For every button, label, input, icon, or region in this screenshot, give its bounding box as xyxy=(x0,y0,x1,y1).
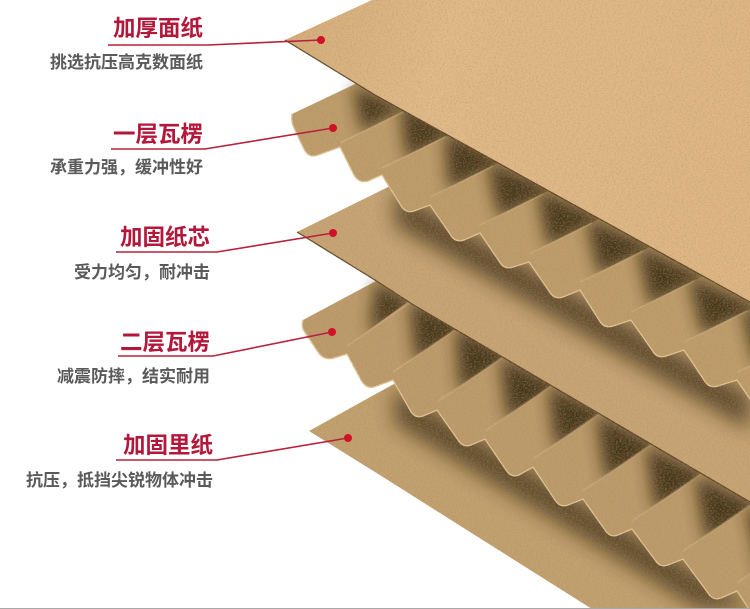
callout: 加固里纸: 加固里纸 xyxy=(123,433,213,458)
first corrugated layer xyxy=(292,60,750,409)
second corrugated layer xyxy=(302,266,750,609)
corrugated ridges xyxy=(340,112,750,372)
sheet: inner liner xyxy=(309,373,750,608)
callout: 二层瓦楞: 二层瓦楞 xyxy=(120,330,210,355)
callout: 加固纸芯: 加固纸芯 xyxy=(120,225,210,250)
callout: 一层瓦楞: 承重力强，缓冲性好 xyxy=(50,158,203,177)
callout: 加固纸芯: 受力均匀，耐冲击 xyxy=(74,263,210,282)
sheet: reinforced core xyxy=(297,150,750,502)
callout: 加厚面纸: 挑选抗压高克数面纸 xyxy=(50,52,203,72)
callout: 一层瓦楞 xyxy=(50,122,337,177)
callout: 加固里纸 xyxy=(26,433,352,490)
callout: 加固纸芯 xyxy=(74,225,337,282)
callout: 加厚面纸: 加厚面纸 xyxy=(113,16,203,41)
callout: 二层瓦楞: 减震防摔，结实耐用 xyxy=(57,366,210,386)
callout: 二层瓦楞 xyxy=(57,328,336,386)
corrugated ridges xyxy=(347,298,750,583)
illustration: corrugated cardboard layers xyxy=(285,0,750,609)
callout: 加固里纸: 抗压，抵挡尖锐物体冲击 xyxy=(26,470,213,490)
callout: 一层瓦楞: 一层瓦楞 xyxy=(113,122,203,147)
sheet: thick face paper xyxy=(285,0,750,302)
callout: 加厚面纸 xyxy=(50,16,325,72)
